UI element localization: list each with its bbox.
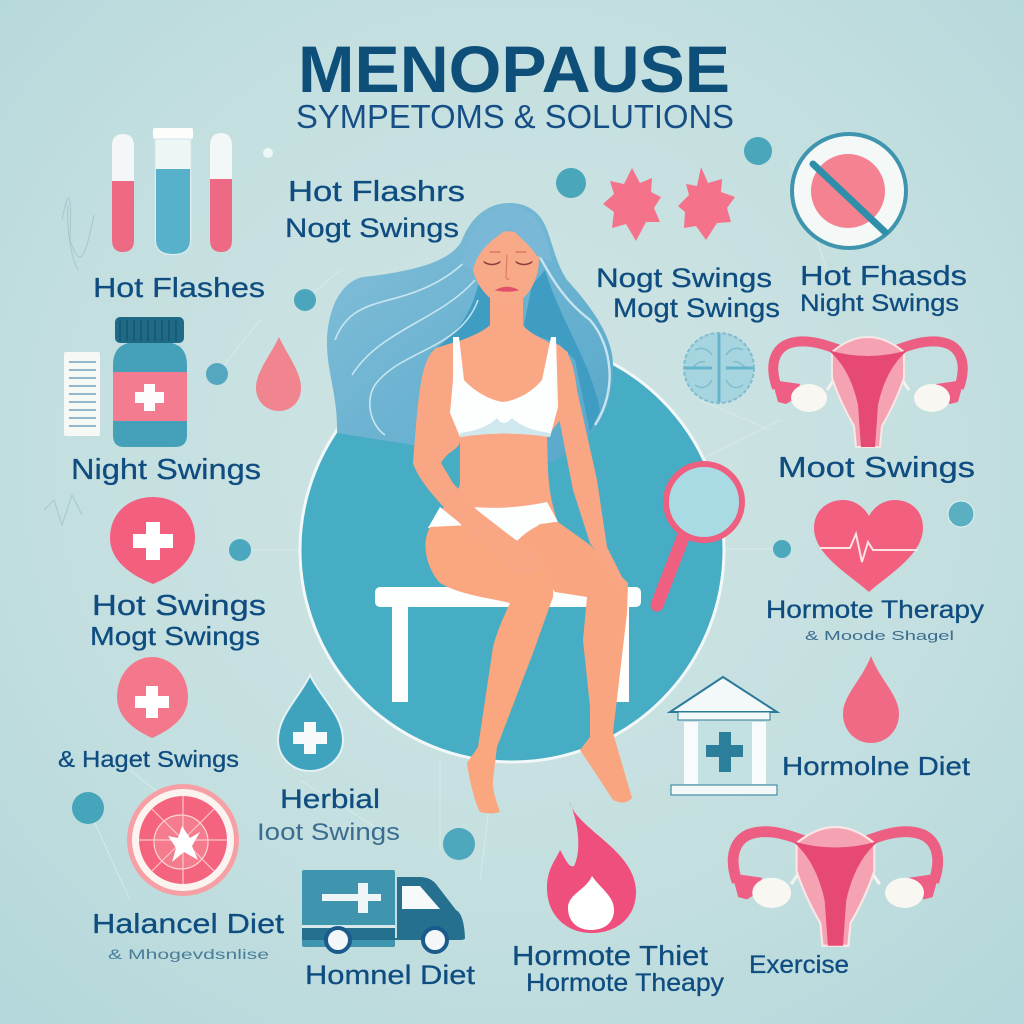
label: hormolne diet: Hormolne Diet	[782, 751, 971, 781]
label: hormote theapy: Hormote Theapy	[526, 969, 725, 997]
icon: grapefruit	[127, 784, 239, 896]
icon: pink drop right	[843, 656, 899, 743]
label: haget swings: & Haget Swings	[58, 746, 239, 772]
icon: brain	[684, 333, 754, 403]
label: nogt swings left: Nogt Swings	[285, 213, 459, 243]
dot	[229, 539, 251, 561]
label: hot flashrs: Hot Flashrs	[288, 176, 465, 208]
bench	[375, 587, 641, 702]
icon: medicine bottle	[113, 317, 187, 447]
bra	[450, 337, 558, 437]
right arm	[550, 342, 627, 590]
left leg	[425, 525, 553, 814]
long blue hair	[327, 203, 613, 463]
woman	[327, 203, 632, 814]
dot	[443, 828, 475, 860]
icon: heart with pulse	[814, 500, 923, 592]
label: exercise: Exercise	[749, 951, 849, 979]
icon: uterus upper	[772, 337, 964, 447]
dot	[556, 168, 586, 198]
label: halancel diet: Halancel Diet	[92, 908, 284, 939]
label: hot flashes: Hot Flashes	[93, 272, 265, 303]
facial features	[484, 252, 532, 279]
label: moot swings: Moot Swings	[778, 452, 975, 484]
title: MENOPAUSE	[298, 32, 730, 106]
dot	[948, 501, 974, 527]
dot	[72, 792, 104, 824]
icon: flame	[547, 801, 636, 933]
face	[471, 231, 539, 307]
icon: pink drop	[256, 337, 301, 411]
label: small caption: & Mhogevdsnlise	[108, 946, 269, 962]
icon: magnifying glass	[657, 464, 742, 605]
label: hot fhasds: Hot Fhasds	[800, 260, 967, 291]
underwear	[428, 502, 558, 541]
subtitle: SYMPETOMS & SOLUTIONS	[296, 98, 734, 135]
label: ioot swings: Ioot Swings	[257, 819, 400, 846]
label: night swings right: Night Swings	[800, 290, 959, 317]
label: mogt swings right: Mogt Swings	[613, 293, 780, 323]
left arm	[413, 342, 543, 574]
icon: cross circle	[110, 497, 195, 584]
label: hormote therapy: Hormote Therapy	[766, 596, 985, 624]
mouth	[497, 288, 517, 291]
faint sketches	[44, 198, 94, 525]
icon: clock	[792, 134, 906, 248]
label: moode shagel: & Moode Shagel	[805, 628, 954, 643]
icon: ambulance truck	[302, 870, 465, 952]
icon: bank building	[670, 677, 777, 795]
torso	[430, 298, 568, 540]
icon: cross drop	[117, 657, 188, 738]
label: hormote thiet: Hormote Thiet	[512, 940, 708, 971]
hair front	[462, 205, 552, 270]
dot	[263, 148, 273, 158]
connector lines	[88, 160, 830, 900]
dot	[206, 363, 228, 385]
icon: test tubes	[112, 128, 232, 255]
icon: blue drop	[278, 675, 343, 771]
label: herbial: Herbial	[280, 784, 380, 814]
icon: star bursts	[603, 167, 735, 241]
dot	[744, 137, 772, 165]
label: hot swings: Hot Swings	[92, 590, 266, 622]
hair highlights	[335, 215, 610, 435]
icon: paper strip	[64, 352, 100, 436]
label: night swings: Night Swings	[71, 454, 261, 486]
dot	[773, 540, 791, 558]
dot	[294, 289, 316, 311]
central circle	[300, 338, 724, 762]
label: mogt swings: Mogt Swings	[90, 621, 260, 651]
label: nogt swings: Nogt Swings	[596, 263, 772, 293]
icon: uterus lower	[732, 827, 939, 946]
label: homnel diet: Homnel Diet	[305, 960, 476, 990]
right leg	[517, 522, 632, 803]
